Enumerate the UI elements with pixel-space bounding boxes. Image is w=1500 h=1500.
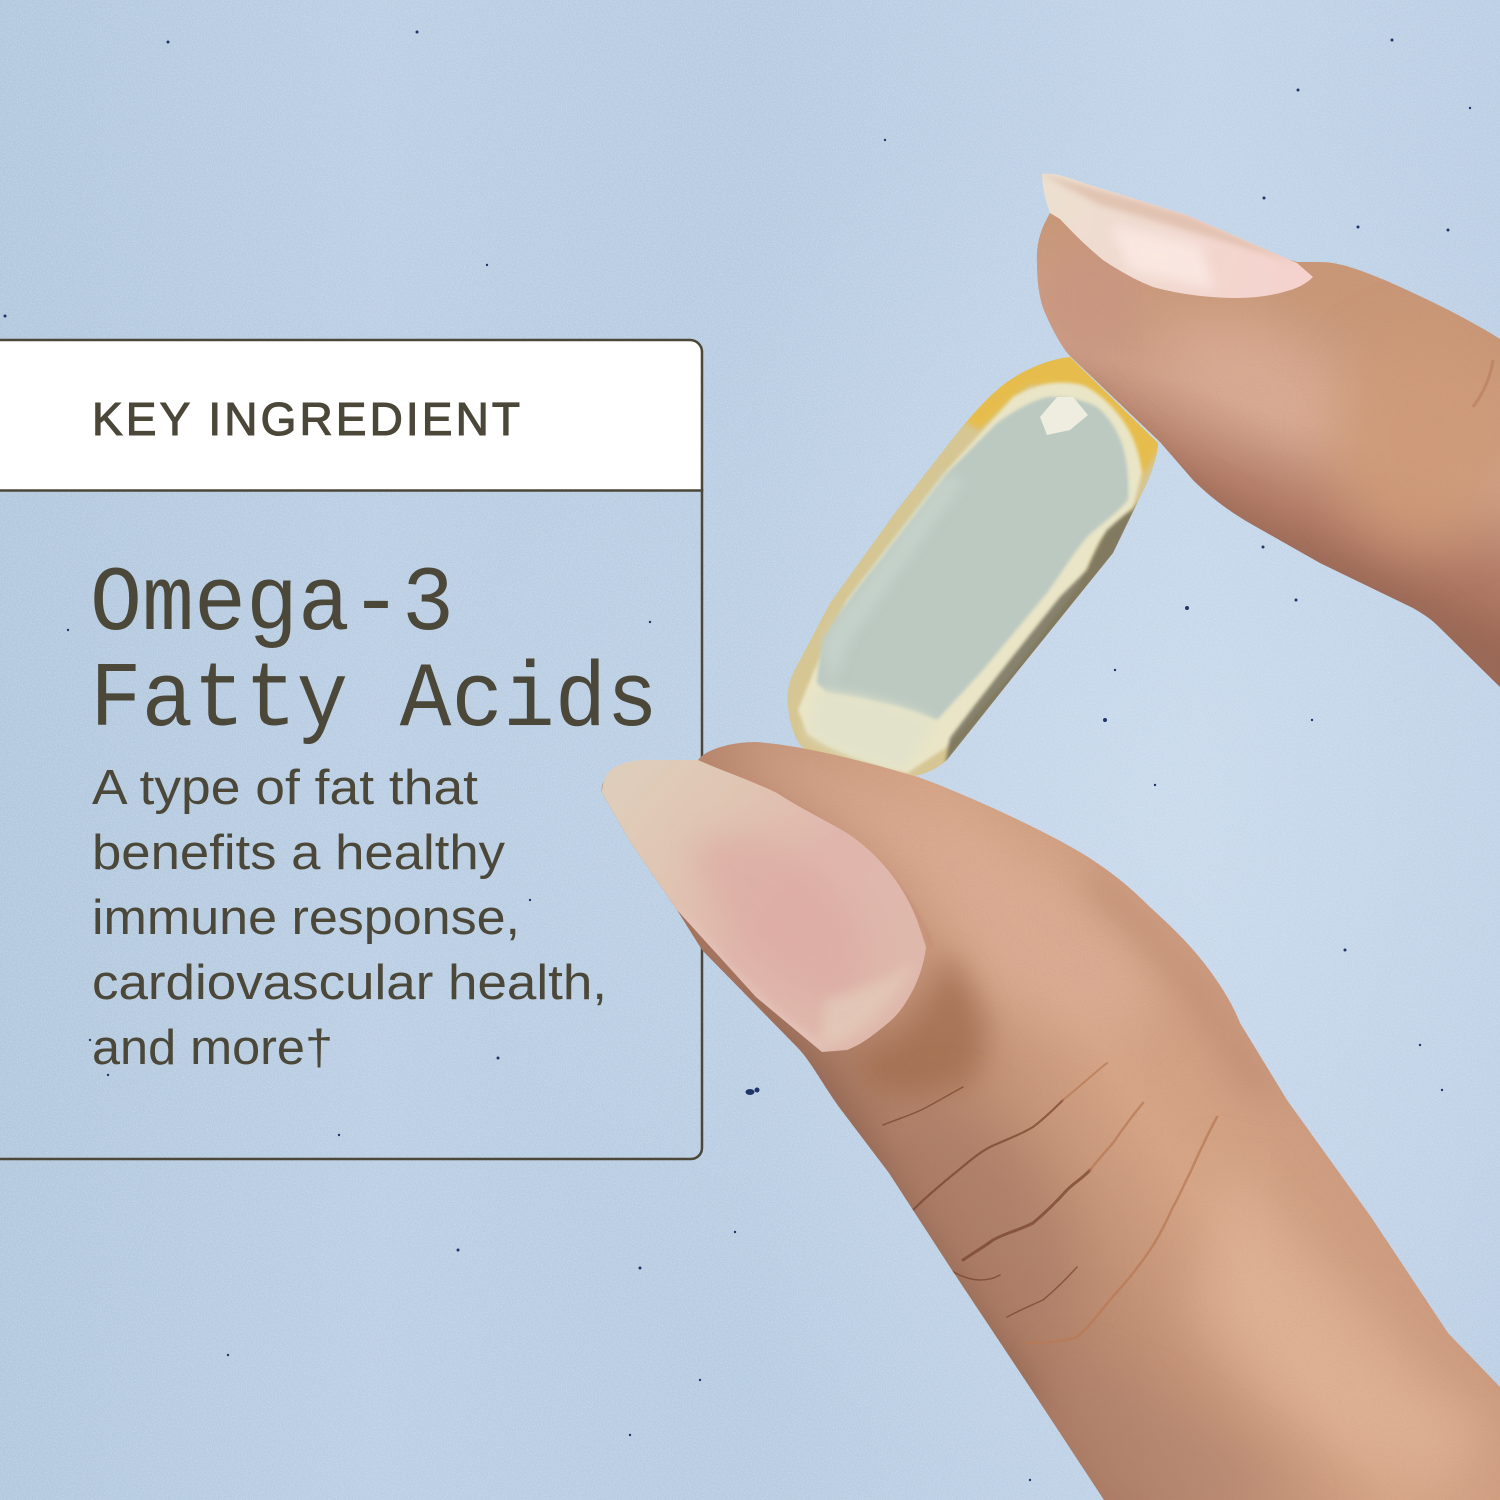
thumb right edge shade: [1090, 860, 1290, 1100]
panel header: white band: [0, 340, 702, 490]
shadow at nail base: [850, 950, 986, 1098]
skin texture: [1030, 170, 1500, 700]
soft orange creases: [1027, 1063, 1217, 1343]
finger body: [1037, 200, 1500, 687]
nail lower tone: [677, 905, 830, 1050]
thumb: [595, 740, 1500, 1500]
capsule cream rim: [798, 383, 1142, 773]
finger pad tone: [1040, 298, 1067, 352]
capsule left sheen: [820, 478, 952, 656]
description: A type of fat that: [92, 761, 478, 815]
capsule highlight top: [1040, 397, 1088, 435]
thumb body: [602, 742, 1500, 1500]
heading: Fatty Acids: [90, 648, 658, 753]
thumb tip pale tone: [758, 753, 1148, 1022]
thumbnail: [595, 750, 935, 1060]
knuckle tone: [856, 1067, 1114, 1353]
softgel capsule: [787, 350, 1165, 777]
capsule dark edge: [945, 500, 1140, 764]
fingernail top: [1042, 174, 1313, 298]
knuckle creases: [883, 1087, 1090, 1317]
lunula: [820, 960, 915, 1050]
description: and more†: [92, 1021, 333, 1075]
capsule amber top: [964, 357, 1158, 480]
pale lower right: [1190, 1150, 1490, 1490]
panel outline: body: [0, 490, 702, 1159]
nail pink bed: [690, 836, 866, 1000]
capsule gel centre: [817, 397, 1128, 720]
header text: KEY INGREDIENT: [92, 393, 520, 445]
heading: [90, 552, 658, 753]
upper finger: [1030, 165, 1500, 720]
description: benefits a healthy: [92, 826, 506, 880]
description: immune response,: [92, 891, 520, 945]
finger lower shadow: [1100, 384, 1500, 687]
heading: Omega-3: [90, 552, 454, 657]
capsule highlight bottom: [807, 690, 935, 770]
nail edge tone: [1050, 176, 1284, 259]
skin texture: [600, 740, 1500, 1500]
lower dark band: [1050, 1360, 1300, 1500]
description: cardiovascular health,: [92, 956, 607, 1010]
label panel: [0, 340, 702, 1159]
joint crease: [1473, 360, 1493, 407]
nail pale highlight: [1116, 228, 1212, 287]
finger orange right side: [1326, 376, 1494, 558]
finger pale highlight: [1182, 320, 1334, 451]
description: [92, 761, 607, 1075]
capsule shell: [787, 357, 1158, 777]
lower edge shadow: [720, 960, 1050, 1410]
nail fold crease: [740, 775, 933, 950]
